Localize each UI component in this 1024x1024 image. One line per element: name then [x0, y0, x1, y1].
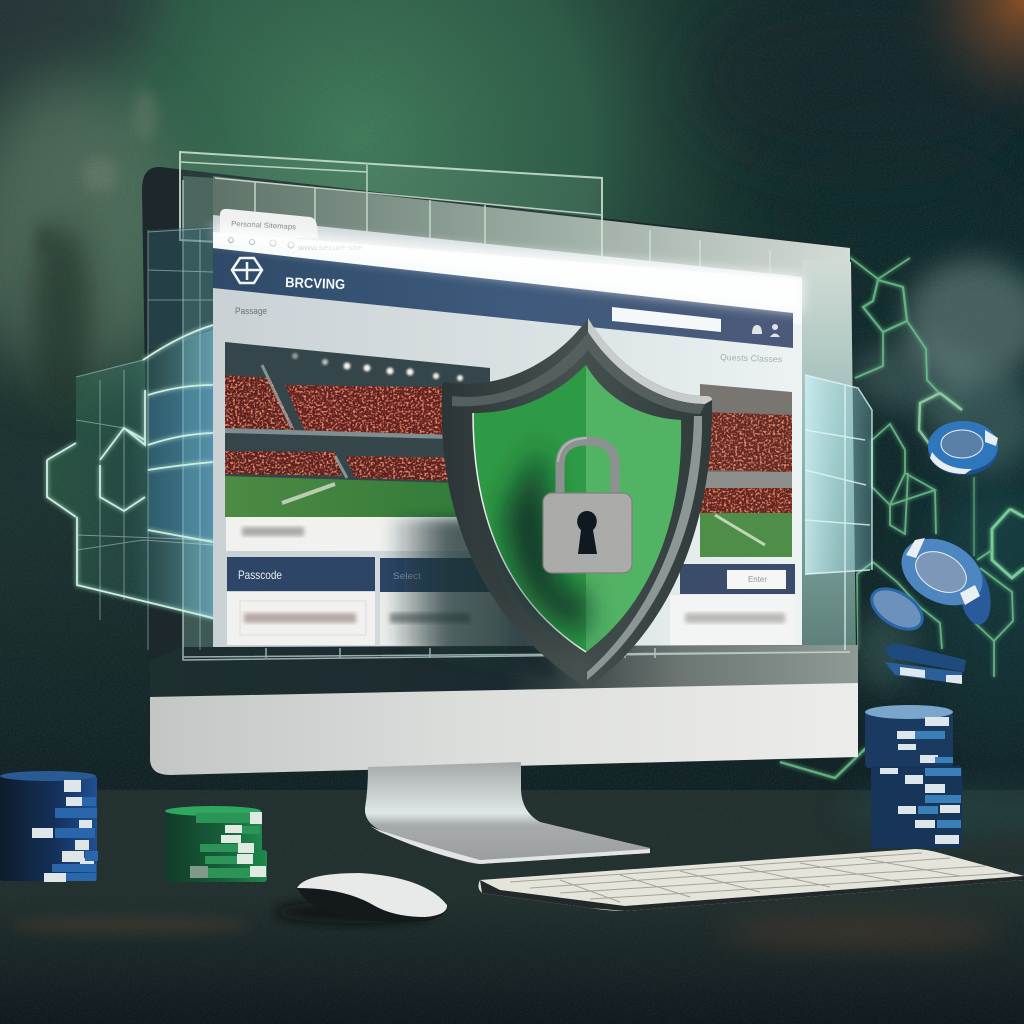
page label: Passage — [235, 306, 267, 316]
glass hex volume left — [47, 226, 213, 650]
browser tab — [220, 209, 318, 240]
browser toolbar: www.secure-site — [297, 245, 362, 252]
mouse — [275, 873, 447, 923]
chip stack right — [865, 705, 962, 848]
keyboard — [478, 849, 1024, 911]
poker chip flying small — [865, 581, 929, 637]
navigation bar — [213, 248, 793, 348]
monitor stand — [365, 762, 650, 864]
glass panel top — [180, 152, 770, 290]
content panel one: Passcode — [238, 568, 282, 582]
screen glare — [213, 226, 802, 312]
chip stack green — [165, 806, 267, 882]
content panel two — [380, 558, 500, 645]
poker chip flying top — [928, 421, 998, 475]
monitor chin — [150, 683, 858, 775]
smoke — [853, 260, 1024, 690]
info strip — [226, 517, 470, 551]
padlock — [543, 438, 632, 573]
right bezel band — [802, 260, 856, 655]
search box — [612, 307, 721, 332]
content panel three — [670, 564, 795, 645]
chip stack left — [0, 771, 98, 882]
site logo — [232, 258, 262, 283]
bottom bezel band — [150, 645, 858, 700]
lock shadow — [505, 445, 586, 640]
browser toolbar — [213, 232, 802, 325]
screen page background — [213, 215, 802, 647]
poker chips mid-air pair — [885, 644, 966, 684]
hero stadium right — [700, 384, 792, 557]
poker chip flying large — [890, 525, 995, 627]
browser tab: Personal Sitemaps — [231, 219, 297, 231]
shield — [442, 318, 712, 688]
page links: Quests Classes — [720, 352, 782, 364]
shield cast shadow — [385, 518, 560, 680]
browser window — [213, 209, 802, 680]
top bezel band — [213, 176, 850, 290]
glass panel lower frame — [183, 180, 850, 660]
glass hex volume right — [805, 375, 872, 650]
nav icons — [752, 324, 780, 337]
hero stadium left — [225, 342, 490, 517]
hexagon network right — [780, 256, 1024, 778]
floor — [0, 785, 1024, 1024]
site name: BRCVING — [285, 274, 346, 292]
monitor bezel — [142, 167, 858, 700]
button: Enter — [748, 575, 767, 584]
content panel one — [227, 557, 375, 645]
keyhole — [577, 511, 597, 554]
content panel two: Select — [393, 571, 422, 581]
